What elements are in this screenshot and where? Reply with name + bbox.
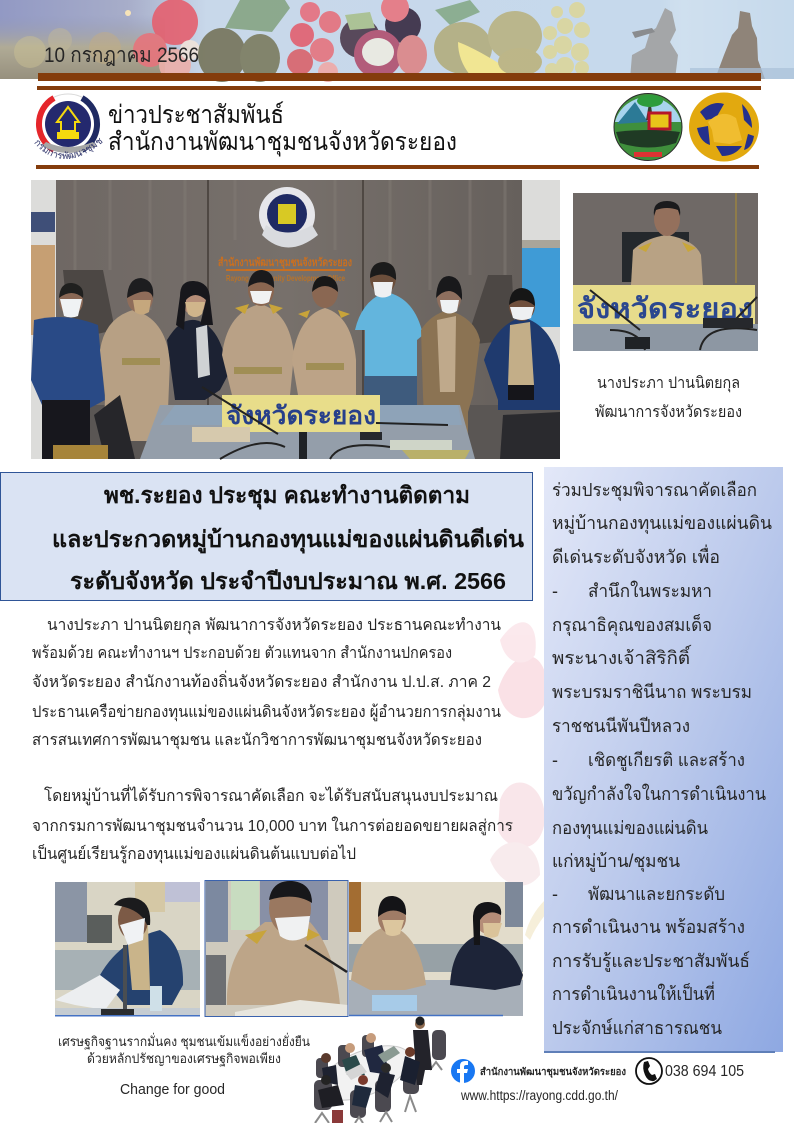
meeting photo 2 — [205, 880, 348, 1017]
headline box: และประกวดหมู่บ้านกองทุนแม่ของแผ่นดินดีเด่น — [52, 526, 524, 554]
person: khaki uniform man — [222, 270, 294, 395]
headline box: พช.ระยอง ประชุม คณะทำงานติดตาม — [104, 482, 470, 510]
table and sign — [53, 387, 560, 459]
icon: facebook — [451, 1059, 475, 1083]
meeting photo 3 — [349, 882, 523, 1016]
meeting photo 1 — [55, 882, 200, 1016]
headline box: ระดับจังหวัด ประจำปีงบประมาณ พ.ศ. 2566 — [70, 568, 506, 594]
side panel: objectives: การดำเนินงานให้เป็นที่ — [552, 981, 715, 1004]
body paragraph 1: สารสนเทศการพัฒนาชุมชน และนักวิชาการพัฒนาชุมชนจังหวัดระยอง — [32, 732, 482, 750]
footer motto: ด้วยหลักปรัชญาของเศรษฐกิจพอเพียง — [87, 1051, 281, 1067]
main group photo: สำนักงานพัฒนาชุมชนจังหวัดระยอง — [218, 255, 352, 270]
date: 10 กรกฎาคม 2566 — [44, 44, 199, 67]
main group photo: Rayong Community Development Office — [226, 273, 345, 283]
body paragraph 2: โดยหมู่บ้านที่ได้รับการพิจารณาคัดเลือก จะได้รับสนับสนุนงบประมาณ — [44, 784, 498, 806]
person: blue shirt — [31, 283, 105, 459]
side panel: objectives: - — [552, 750, 558, 770]
body paragraph 1: พร้อมด้วย คณะทำงานฯ ประกอบด้วย ตัวแทนจาก สำนักงานปกครอง — [32, 644, 452, 662]
side panel: objectives: ดีเด่นระดับจังหวัด เพื่อ — [552, 544, 720, 567]
side panel: objectives: กองทุนแม่ของแผ่นดิน — [552, 818, 708, 839]
side panel: objectives: การดำเนินงาน พร้อมสร้าง — [552, 917, 745, 937]
side panel: objectives: สำนึกในพระมหา — [588, 580, 712, 601]
side panel: objectives: แก่หมู่บ้าน/ชุมชน — [552, 851, 680, 872]
side panel: objectives: กรุณาธิคุณของสมเด็จ — [552, 613, 712, 636]
footer motto — [58, 1032, 310, 1098]
footer motto: Change for good — [120, 1081, 225, 1098]
side panel: objectives: การรับรู้และประชาสัมพันธ์ — [552, 951, 750, 972]
main group photo — [31, 180, 560, 459]
caption: director name — [595, 375, 742, 421]
side panel: objectives — [544, 467, 783, 1053]
body paragraph 1: นางประภา ปานนิตยกุล พัฒนาการจังหวัดระยอง ประธานคณะทำงาน — [47, 617, 501, 635]
side panel: objectives: พระนางเจ้าสิริกิติ์ — [552, 644, 692, 668]
side panel: objectives: พระบรมราชินีนาถ พระบรม — [552, 682, 752, 702]
side panel: objectives: - — [552, 884, 558, 904]
side panel: objectives: ราชชนนีพันปีหลวง — [552, 716, 690, 736]
website: www.https://rayong.cdd.go.th/ — [460, 1088, 618, 1103]
side panel: objectives: หมู่บ้านกองทุนแม่ของแผ่นดิน — [552, 513, 772, 534]
facebook page name: สำนักงานพัฒนาชุมชนจังหวัดระยอง — [480, 1066, 626, 1078]
heading: ข่าวประชาสัมพันธ์ — [108, 101, 284, 129]
heading: สำนักงานพัฒนาชุมชนจังหวัดระยอง — [108, 128, 457, 157]
person: khaki uniform woman — [100, 278, 170, 441]
person: brown jacket woman — [421, 276, 480, 440]
portrait photo of director: จังหวัดระยอง — [577, 293, 753, 324]
table and sign: จังหวัดระยอง — [226, 402, 376, 430]
banner: fruits and Rayong scenery — [0, 0, 794, 82]
side panel: objectives: ขวัญกำลังใจในการดำเนินงาน — [552, 783, 766, 804]
illustration: business meeting — [312, 1016, 446, 1123]
phone number: 038 694 105 — [665, 1063, 744, 1080]
seal: Ministry of Interior — [689, 92, 759, 162]
body paragraph 2 — [32, 784, 513, 864]
caption: director name: นางประภา ปานนิตยกุล — [597, 375, 740, 393]
header rules — [36, 73, 761, 169]
body paragraph 1: ประธานเครือข่ายกองทุนแม่ของแผ่นดินจังหวัดระยอง ผู้อำนวยการกลุ่มงาน — [32, 703, 501, 722]
footer motto: เศรษฐกิจฐานรากมั่นคง ชุมชนเข้มแข็งอย่างยั่งยืน — [58, 1032, 310, 1050]
decorative flowers behind text — [490, 622, 548, 940]
side panel: objectives: พัฒนาและยกระดับ — [588, 884, 725, 904]
body paragraph 1: จังหวัดระยอง สำนักงานท้องถิ่นจังหวัดระยอง สำนักงาน ป.ป.ส. ภาค 2 — [32, 670, 491, 691]
headline box — [0, 472, 532, 600]
body paragraph 2: จากกรมการพัฒนาชุมชนจำนวน 10,000 บาท ในการต่อยอดขยายผลสู่การ — [32, 816, 513, 836]
body paragraph 1 — [32, 617, 501, 750]
person: navy jacket man — [484, 288, 560, 410]
icon: phone — [636, 1058, 662, 1084]
side panel: objectives: ประจักษ์แก่สาธารณชน — [552, 1018, 722, 1038]
heading — [108, 101, 457, 157]
seal: Rayong province — [614, 94, 682, 160]
person: light blue polo — [355, 262, 423, 408]
side panel: objectives: ร่วมประชุมพิจารณาคัดเลือก — [552, 480, 757, 501]
logo: community development department — [34, 94, 103, 159]
person: black jacket woman — [167, 281, 228, 400]
person: khaki uniform director — [292, 276, 356, 395]
caption: director name: พัฒนาการจังหวัดระยอง — [595, 404, 742, 421]
side panel: objectives: เชิดชูเกียรติ และสร้าง — [588, 750, 745, 771]
side panel: objectives: - — [552, 581, 558, 601]
portrait photo of director — [573, 193, 758, 351]
body paragraph 2: เป็นศูนย์เรียนรู้กองทุนแม่ของแผ่นดินต้นแบบต่อไป — [32, 843, 356, 864]
